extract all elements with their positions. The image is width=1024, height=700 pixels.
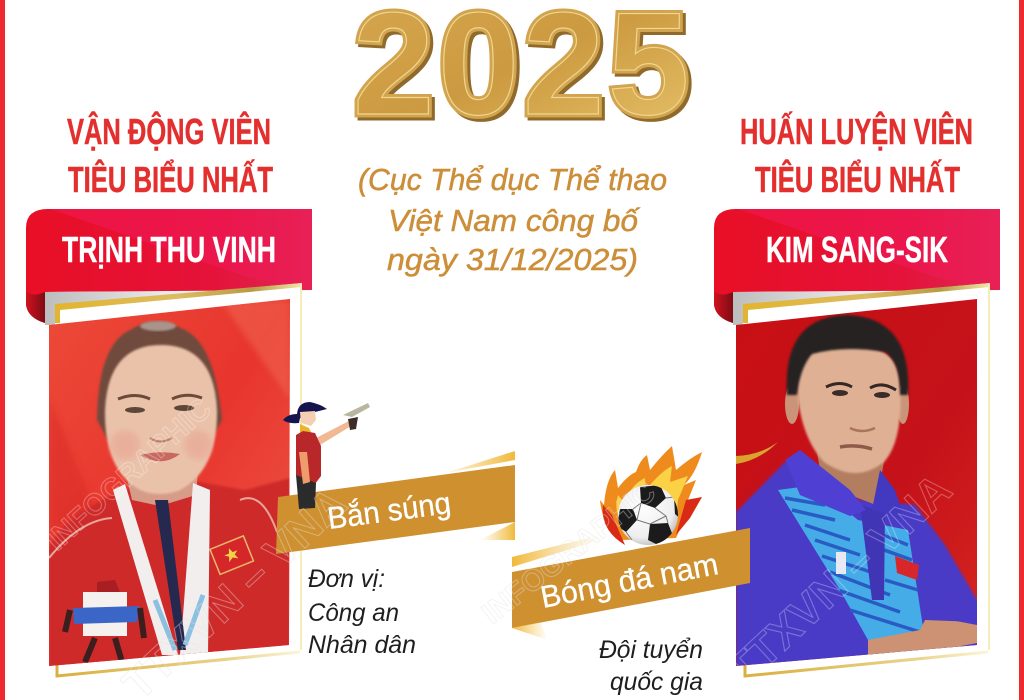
ribbon: Ban sung bbox=[276, 451, 515, 554]
cyan chest pattern bbox=[778, 485, 925, 640]
yellow swoosh bbox=[736, 442, 778, 464]
sport label: Bắn súng bbox=[325, 485, 453, 536]
subtitle: source and date: (Cục Thể dục Thể thao bbox=[358, 162, 667, 197]
coach name: KIM SANG-SIK bbox=[766, 229, 948, 270]
polo shirt bbox=[736, 462, 977, 666]
ears bbox=[785, 384, 799, 424]
icon: pistol shooter bbox=[283, 402, 370, 509]
right red border bbox=[1019, 0, 1024, 700]
flag patch bbox=[210, 536, 253, 574]
panel: athlete ribbon bbox=[26, 209, 312, 323]
collar bbox=[785, 450, 866, 516]
mascot badge bbox=[83, 592, 127, 636]
coach photo frame bbox=[733, 283, 990, 676]
ribbon: Bong da nam bbox=[512, 528, 750, 640]
unit: coach: Đội tuyển bbox=[599, 636, 703, 664]
jacket bbox=[49, 478, 290, 666]
heading: best athlete: TIÊU BIỂU NHẤT bbox=[68, 158, 273, 200]
heading: best coach bbox=[740, 110, 973, 200]
left red border bbox=[0, 0, 5, 700]
chest flag bbox=[895, 556, 919, 580]
sport label: Bóng đá nam bbox=[538, 546, 721, 615]
photo: Kim Sang-sik portrait bbox=[736, 299, 977, 666]
photo watermark: TTXVN – VNA bbox=[718, 464, 961, 695]
panel: coach ribbon bbox=[714, 209, 1000, 323]
athlete name: TRỊNH THU VINH bbox=[62, 229, 276, 270]
subtitle: source and date: ngày 31/12/2025) bbox=[387, 242, 638, 277]
unit: coach bbox=[599, 636, 703, 696]
crossed arms bbox=[868, 620, 977, 655]
icon: flaming football bbox=[600, 446, 702, 552]
unit: athlete: Công an bbox=[308, 599, 399, 627]
face bbox=[105, 345, 217, 494]
athlete photo frame bbox=[45, 283, 302, 676]
photo watermark: INFOGRAPHIC bbox=[40, 392, 218, 557]
unit: coach: quốc gia bbox=[610, 668, 703, 696]
unit: athlete bbox=[308, 565, 416, 659]
face bbox=[796, 345, 901, 473]
watermark: background INFOGRAPHIC: INFOGRAPHIC bbox=[476, 475, 662, 631]
heading: best athlete: VẬN ĐỘNG VIÊN bbox=[67, 110, 271, 152]
unit: athlete: Đơn vị: bbox=[308, 565, 385, 593]
hair bbox=[97, 322, 222, 440]
photo: Trinh Thu Vinh portrait bbox=[40, 299, 290, 666]
subtitle: source and date bbox=[358, 162, 667, 277]
neck bbox=[127, 474, 198, 506]
chest logo bbox=[836, 552, 846, 574]
hair bbox=[787, 315, 908, 395]
subtitle: source and date: Việt Nam công bố bbox=[388, 203, 641, 238]
lanyards bbox=[113, 484, 178, 655]
heading: best athlete bbox=[67, 110, 273, 200]
unit: athlete: Nhân dân bbox=[308, 631, 416, 659]
neck bbox=[817, 451, 884, 504]
placket bbox=[860, 505, 885, 600]
